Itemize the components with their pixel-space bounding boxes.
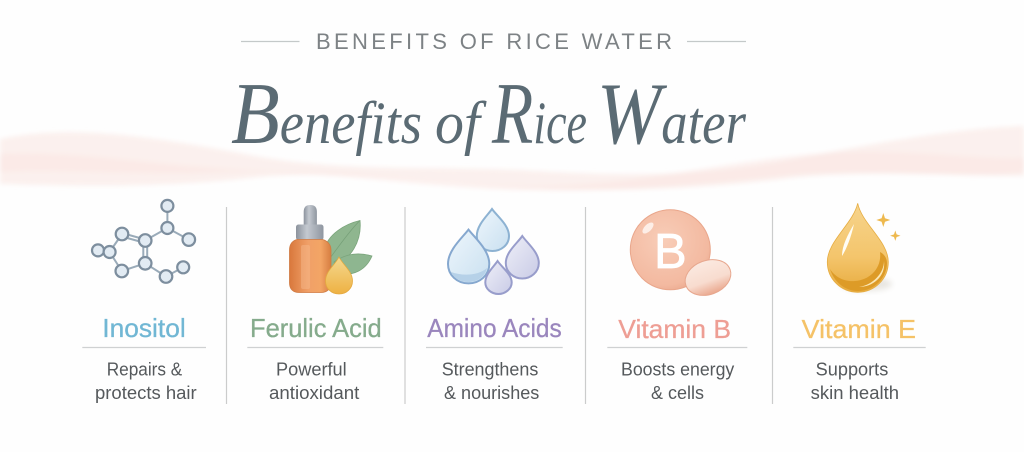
title: Water [597, 66, 747, 163]
panel: Amino Acids [426, 209, 563, 403]
description: Amino Acids: Strengthens [442, 360, 538, 380]
description: Vitamin E [811, 360, 899, 403]
description: Vitamin E: Supports [816, 360, 888, 380]
name: Ferulic Acid: Ferulic Acid [250, 313, 382, 343]
description: Amino Acids: & nourishes [444, 383, 539, 403]
icon: vitamin B capsule [630, 210, 736, 302]
description: Vitamin E: skin health [811, 383, 899, 403]
icon: molecule [92, 200, 195, 283]
description: Ferulic Acid: antioxidant [269, 383, 359, 403]
description: Amino Acids [442, 360, 539, 403]
icon: golden oil drop with sparkles [827, 203, 900, 292]
description: Inositol: protects hair [95, 383, 197, 403]
title [231, 66, 747, 163]
name: Vitamin B: Vitamin B [618, 314, 731, 344]
description: Ferulic Acid: Powerful [276, 360, 347, 380]
title: Benefits [231, 66, 422, 163]
description: Inositol: Repairs & [107, 360, 182, 380]
panel: Vitamin E [793, 203, 926, 403]
description: Vitamin B [621, 360, 734, 403]
panel: Ferulic Acid [247, 205, 383, 403]
icon: water droplets [448, 209, 539, 294]
description: Inositol [95, 360, 197, 403]
panel: Inositol [82, 200, 206, 403]
description: Vitamin B: Boosts energy [621, 360, 734, 380]
name: Vitamin E: Vitamin E [802, 314, 916, 344]
title: of [435, 90, 487, 156]
description: Vitamin B: & cells [651, 383, 704, 403]
name: Amino Acids: Amino Acids [427, 313, 562, 343]
eyebrow heading: BENEFITS OF RICE WATER [316, 29, 672, 54]
watercolor wave band [0, 126, 1024, 190]
panel: Vitamin B [607, 210, 747, 403]
icon: serum bottle with leaves [290, 205, 372, 294]
icon: vitamin B capsule: B [654, 225, 687, 279]
title: Rice [491, 66, 587, 163]
name: Inositol: Inositol [102, 313, 186, 343]
description: Ferulic Acid [269, 360, 359, 403]
